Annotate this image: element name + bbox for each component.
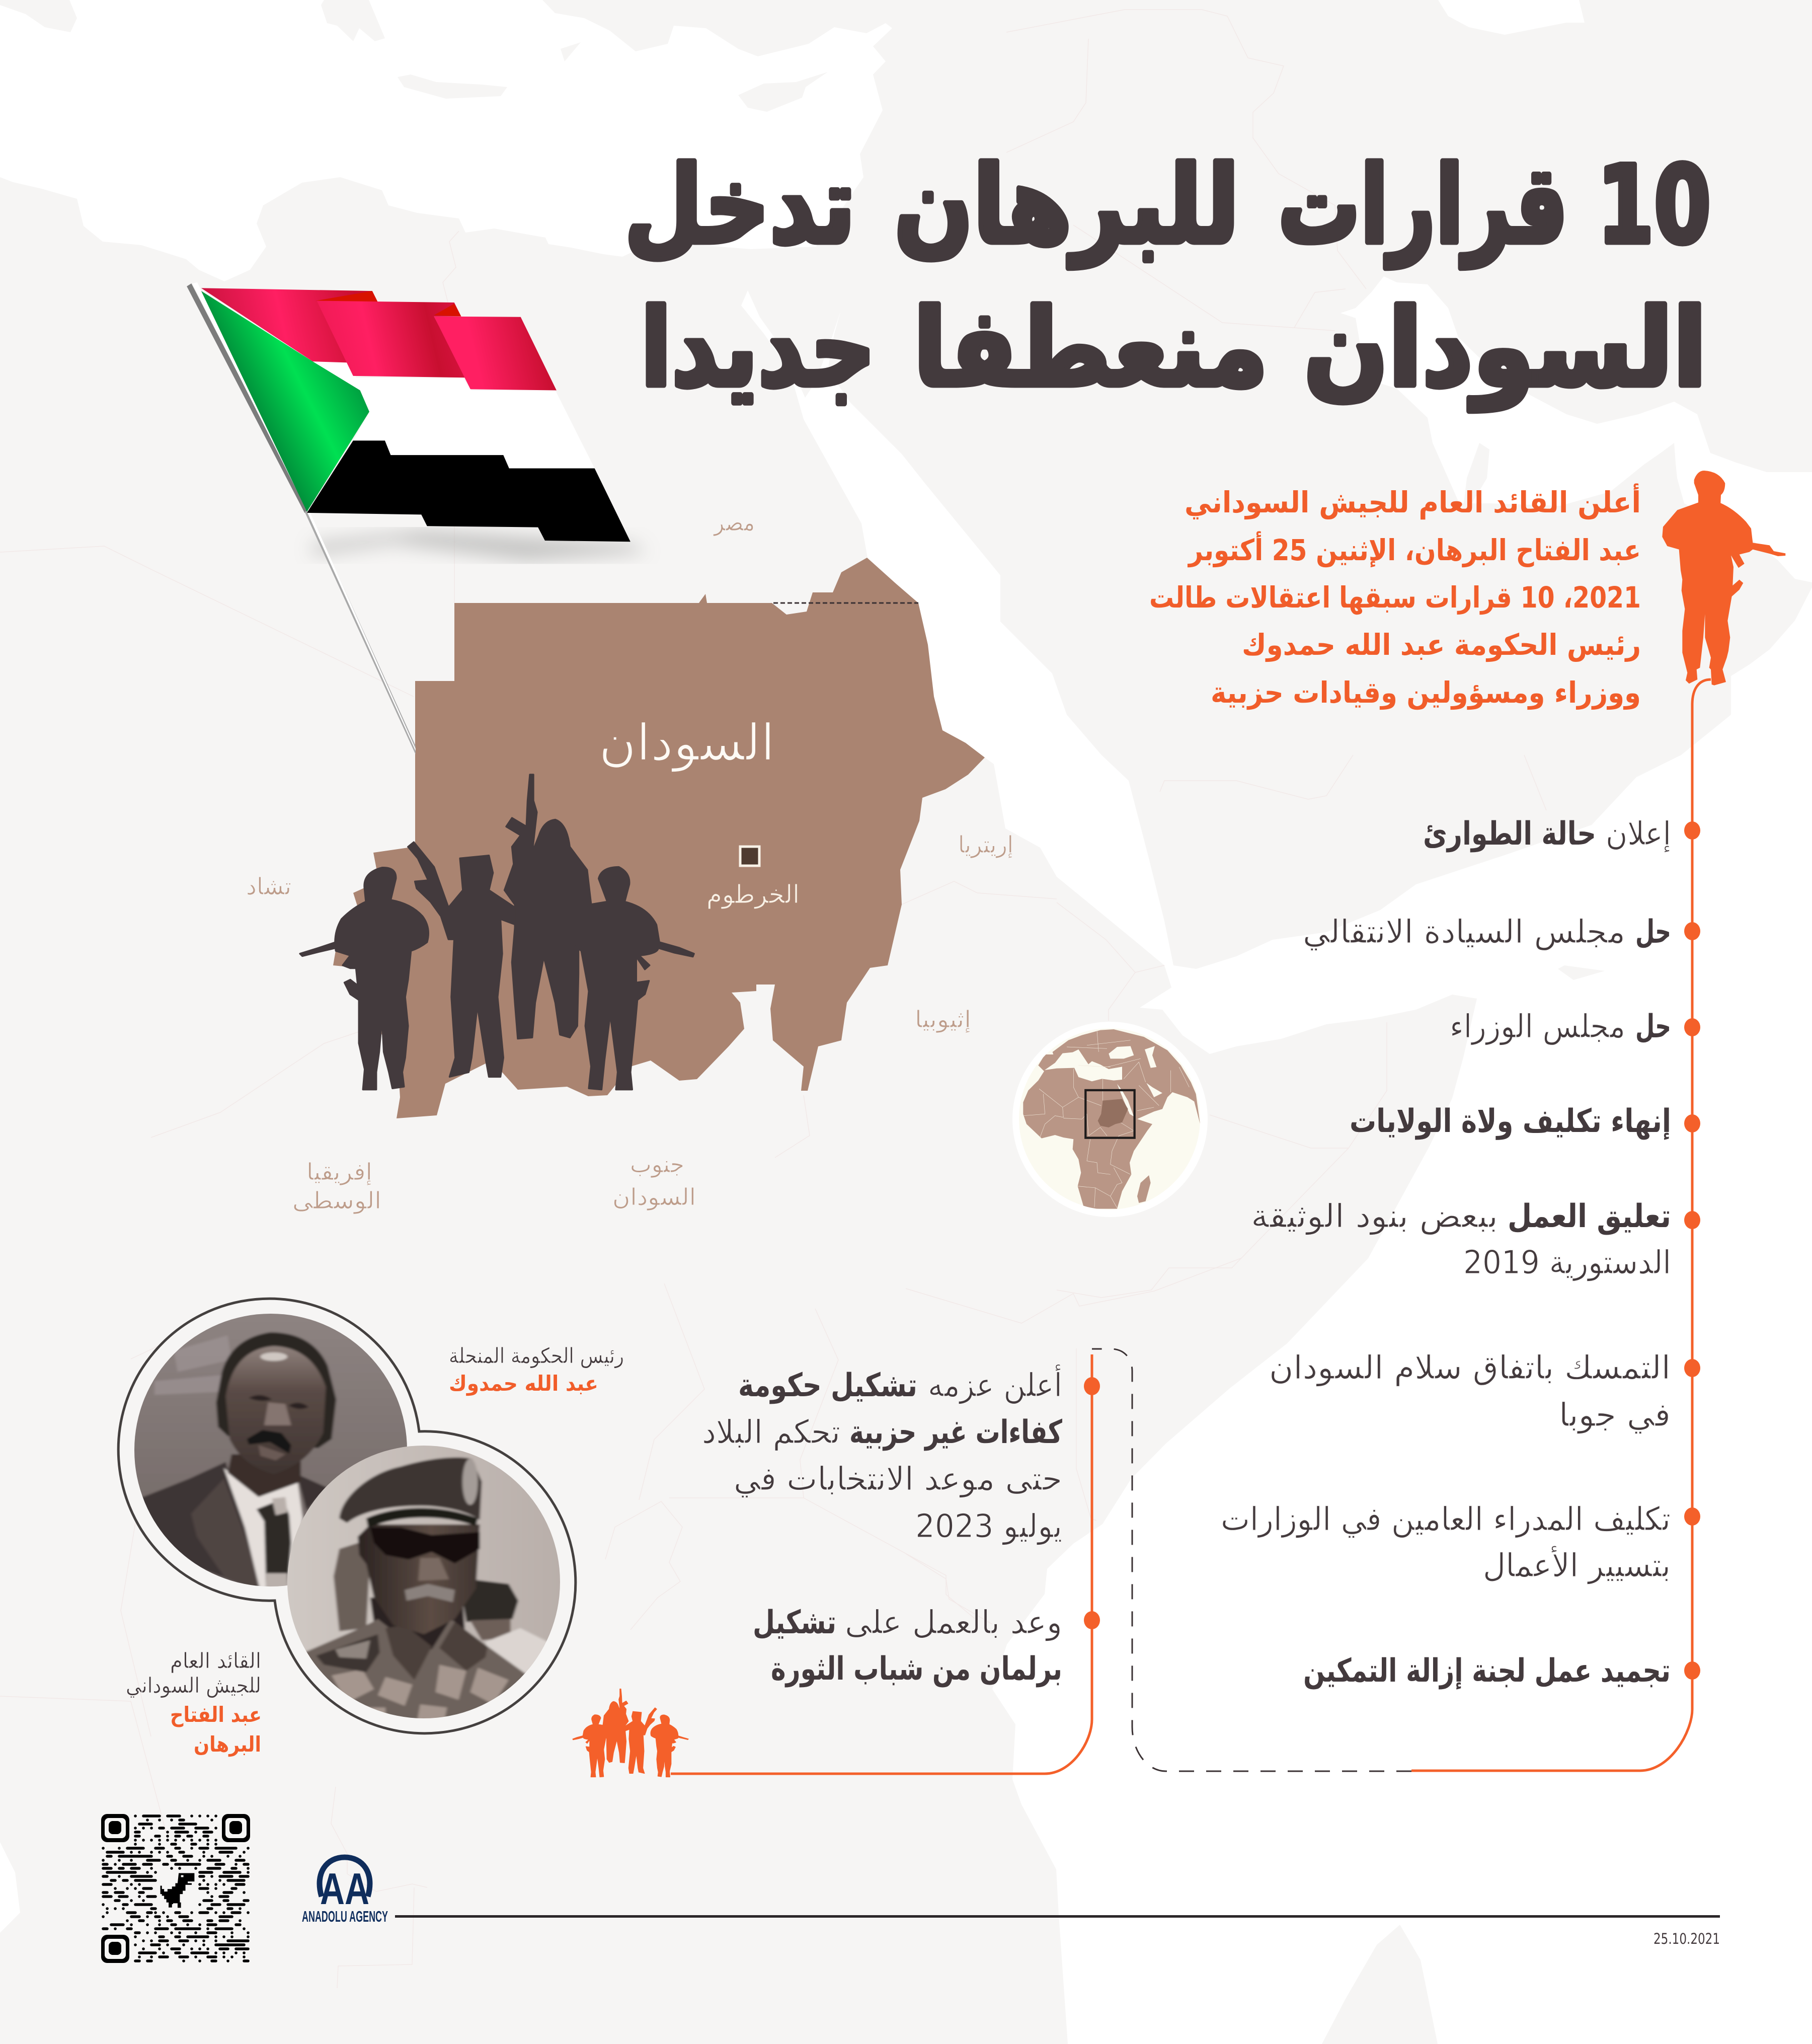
- caption: Burhan: للجيش السوداني: [126, 1673, 261, 1698]
- decisions list: ببعض بنود الوثيقة: [1251, 1198, 1498, 1235]
- decisions list: [1221, 815, 1671, 1690]
- decisions list: تعليق العمل: [1508, 1198, 1671, 1235]
- decisions list: مجلس الوزراء: [1450, 1008, 1625, 1045]
- flag of Sudan on a pole: [187, 282, 648, 754]
- neighbouring country labels: جنوب: [630, 1151, 684, 1178]
- title: 10: [1597, 143, 1711, 267]
- inset globe locator: [1012, 1022, 1208, 1217]
- promises list: [702, 1364, 1063, 1688]
- promises list: تشكيل: [753, 1604, 836, 1641]
- decisions list: حل: [1635, 914, 1671, 951]
- portrait: Abdel Fattah al-Burhan: [287, 1446, 560, 1718]
- date: 25.10.2021: [1653, 1930, 1720, 1947]
- neighbouring country labels: إفريقيا: [306, 1158, 372, 1186]
- marker: Khartoum: الخرطوم: [706, 880, 800, 909]
- intro paragraph: 2021، 10 قرارات سبقها اعتقالات طالت: [1149, 580, 1641, 615]
- Anadolu Agency logo: [302, 1857, 388, 1925]
- intro paragraph: رئيس الحكومة عبد الله حمدوك: [1242, 628, 1641, 662]
- caption: Burhan: القائد العام: [170, 1648, 261, 1673]
- title: منعطفا: [913, 286, 1268, 410]
- intro paragraph: [1149, 483, 1641, 710]
- intro paragraph: ووزراء ومسؤولين وقيادات حزبية: [1211, 675, 1641, 710]
- decisions list: تكليف المدراء العامين في الوزارات: [1221, 1501, 1671, 1538]
- promises list: يوليو 2023: [915, 1508, 1062, 1545]
- QR code: [101, 1814, 250, 1963]
- Anadolu Agency logo: AA: [320, 1864, 369, 1914]
- decisions list: حالة الطوارئ: [1423, 815, 1596, 853]
- icon: dinosaur: [161, 1873, 194, 1908]
- portrait frame: [118, 1299, 576, 1733]
- title: قرارات: [1278, 143, 1568, 268]
- title: جديدا: [641, 286, 876, 410]
- title: السودان: [1304, 286, 1707, 411]
- main timeline line with dashed return: [671, 679, 1711, 1774]
- promises list: كفاءات غير حزبية: [849, 1414, 1063, 1451]
- promises list: أعلن عزمه: [928, 1364, 1062, 1404]
- neighbouring country labels: تشاد: [246, 873, 291, 900]
- caption: Hamdok: رئيس الحكومة المنحلة: [449, 1343, 624, 1368]
- caption: Burhan: [126, 1648, 262, 1757]
- caption: Hamdok: عبد الله حمدوك: [449, 1371, 598, 1396]
- decisions list: التمسك باتفاق سلام السودان: [1269, 1349, 1671, 1387]
- decisions list: إنهاء تكليف ولاة الولايات: [1350, 1103, 1671, 1140]
- map label: Sudan: السودان: [599, 713, 775, 772]
- decisions list: تجميد عمل لجنة إزالة التمكين: [1303, 1652, 1671, 1690]
- icon: small orange soldiers: [573, 1689, 688, 1777]
- map of Sudan: [333, 558, 985, 1118]
- marker: Khartoum: [706, 847, 800, 909]
- title: [624, 143, 1711, 411]
- promises list: حتى موعد الانتخابات في: [734, 1461, 1062, 1498]
- neighbouring country labels: إريتريا: [958, 831, 1013, 859]
- promises list: تشكيل حكومة: [738, 1367, 917, 1404]
- intro paragraph: أعلن القائد العام للجيش السوداني: [1185, 483, 1641, 520]
- decisions list: الدستورية 2019: [1463, 1244, 1671, 1281]
- Anadolu Agency logo: ANADOLU AGENCY: [302, 1908, 388, 1925]
- neighbouring country labels: [246, 509, 1013, 1215]
- decisions list: في جوبا: [1559, 1397, 1671, 1434]
- decisions list: مجلس السيادة الانتقالي: [1303, 914, 1625, 951]
- decisions list: حل: [1635, 1008, 1671, 1045]
- caption: Burhan: البرهان: [194, 1732, 261, 1757]
- neighbouring country labels: الوسطى: [292, 1187, 381, 1215]
- neighbouring country labels: السودان: [612, 1183, 696, 1211]
- soldiers silhouettes: [300, 775, 694, 1090]
- portrait: Abdalla Hamdok: [134, 1314, 407, 1586]
- decisions list: بتسيير الأعمال: [1483, 1545, 1671, 1584]
- footer rule: [395, 1915, 1720, 1918]
- timeline dots: [1084, 821, 1700, 1680]
- caption: Hamdok: [449, 1343, 624, 1396]
- neighbouring country labels: مصر: [713, 509, 755, 537]
- promises list: وعد بالعمل على: [845, 1604, 1062, 1641]
- neighbouring country labels: إثيوبيا: [915, 1006, 971, 1033]
- promises list: برلمان من شباب الثورة: [771, 1650, 1062, 1688]
- promises list: تحكم البلاد: [702, 1414, 840, 1451]
- intro paragraph: عبد الفتاح البرهان، الإثنين 25 أكتوبر: [1187, 531, 1641, 568]
- decisions list: إعلان: [1606, 815, 1671, 853]
- title: للبرهان: [894, 143, 1239, 268]
- title: تدخل: [624, 143, 855, 267]
- caption: Burhan: عبد الفتاح: [170, 1702, 262, 1727]
- icon: orange soldier: [1662, 471, 1785, 686]
